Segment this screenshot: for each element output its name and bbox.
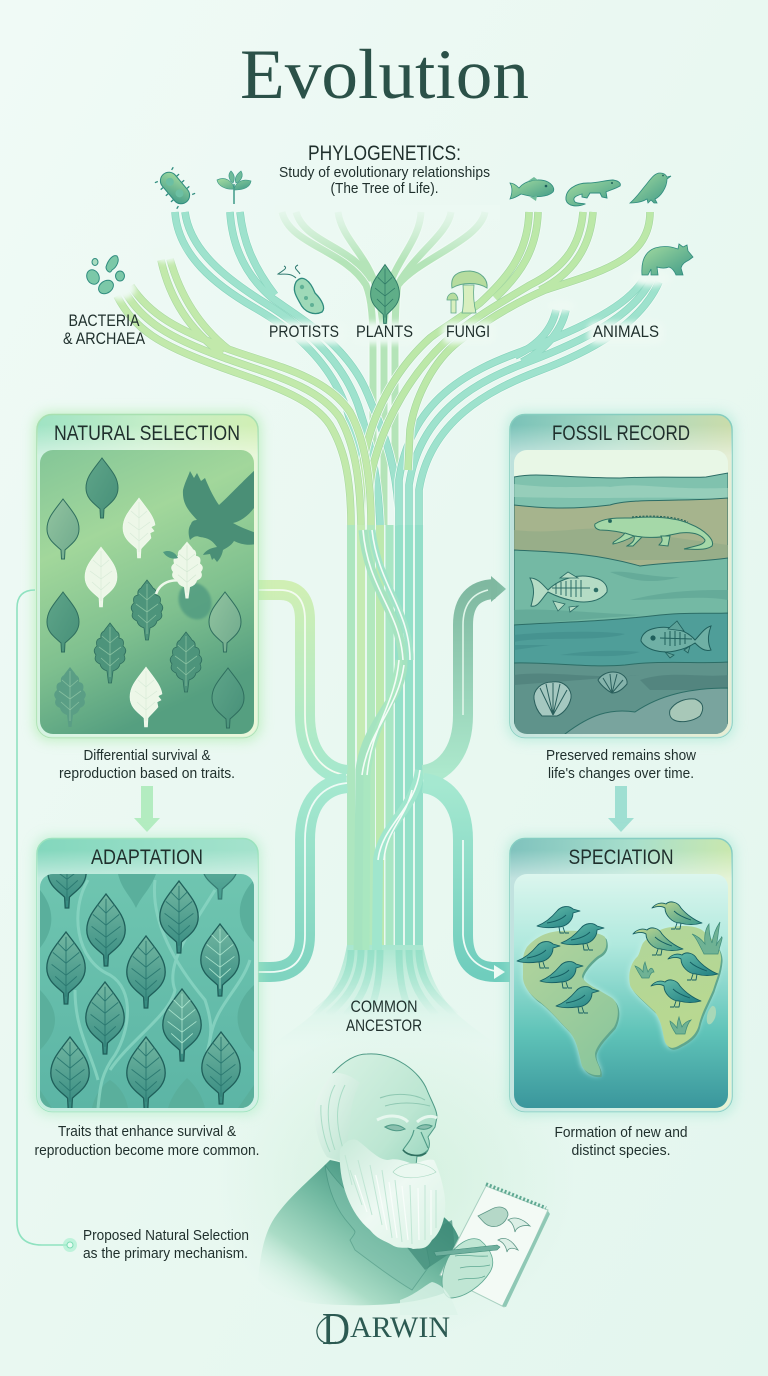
label: common ancestor: COMMON: [350, 997, 418, 1016]
coat: [258, 1160, 464, 1305]
coat lapels: [325, 1165, 430, 1290]
grass tufts: [635, 922, 722, 1034]
branch: protists: [175, 212, 399, 525]
arrow: fossil record to speciation: [608, 786, 634, 832]
caption: fossil record: life's changes over time.: [548, 766, 694, 782]
label: common ancestor: [346, 997, 422, 1035]
phylogenetics heading and description: Study of evolutionary relationships: [279, 165, 490, 181]
icon: bear: [642, 244, 693, 275]
hair: [315, 1073, 360, 1162]
icon: fish: [510, 177, 554, 201]
continent: right: [629, 926, 723, 1050]
branch: animals: [399, 280, 659, 525]
panel: speciation: [507, 836, 735, 1115]
panel: fossil record: [507, 412, 735, 741]
birds: left continent: [517, 907, 604, 1013]
caption: natural selection: reproduction based on traits.: [59, 766, 235, 782]
trunk base: [351, 525, 419, 950]
icon: lizard: [566, 180, 620, 206]
logo: darwin signature: D: [322, 1303, 350, 1354]
panel: adaptation: [34, 833, 261, 1115]
trunk foot: [268, 945, 500, 1048]
notebook: [440, 1184, 550, 1307]
hand with pencil: [400, 1239, 500, 1315]
leaf pattern: [40, 874, 254, 1108]
beard strands: [345, 1155, 436, 1244]
phylogenetics heading and description: PHYLOGENETICS:: [308, 142, 461, 165]
fossil: shells: [534, 672, 703, 722]
icon: cell bacterium: [154, 166, 196, 210]
label: common ancestor: ANCESTOR: [346, 1016, 422, 1035]
caption: adaptation: [34, 1124, 260, 1159]
icon: sprout: [217, 171, 251, 204]
arrow: natural selection to adaptation: [134, 786, 160, 832]
fossil: reptile: [595, 516, 713, 549]
labels: taxa: FUNGI: [446, 322, 490, 341]
tip fades: [104, 205, 671, 344]
phylogenetics heading and description: (The Tree of Life).: [330, 181, 438, 197]
connector: trunk to adaptation: [258, 783, 347, 972]
leaves and predator scene: [47, 458, 256, 728]
caption: speciation: Formation of new and: [554, 1125, 688, 1141]
icon: songbird: [630, 173, 671, 203]
logo: darwin signature: ARWIN: [350, 1311, 450, 1344]
callout text: as the primary mechanism.: [83, 1246, 248, 1262]
labels: taxa: & ARCHAEA: [63, 329, 146, 348]
rock strata scene: [514, 450, 728, 740]
tree of life: [117, 212, 659, 1048]
icon: bird of prey silhouette: [183, 469, 256, 562]
woven trunk strands: [358, 530, 420, 950]
fossil: fish two: [641, 621, 711, 658]
caption: fossil record: Preserved remains show: [546, 748, 696, 764]
icon: plant leaf: [371, 265, 399, 323]
brow, eyes and nose: [377, 1094, 437, 1156]
phylogenetics heading and description: [279, 142, 490, 197]
caption: speciation: distinct species.: [572, 1143, 670, 1159]
hair strands: [321, 1085, 345, 1155]
icon: mushrooms: [447, 271, 487, 313]
connector: natural selection to trunk: [258, 590, 347, 775]
labels: taxa: PLANTS: [356, 322, 413, 341]
caption: adaptation: Traits that enhance survival &: [58, 1124, 236, 1140]
labels: taxa: [63, 311, 659, 348]
portrait: charles darwin: [258, 1054, 550, 1315]
labels: taxa: BACTERIA: [68, 311, 140, 330]
captured pale leaf: [156, 542, 203, 598]
icon: bacteria and archaea: [84, 256, 124, 297]
caption: fossil record: [546, 748, 696, 782]
continent: left: [523, 931, 619, 1077]
title: Evolution: [240, 36, 529, 114]
connector: trunk to fossil record: [423, 576, 506, 775]
logo: darwin signature: [317, 1303, 450, 1354]
branches: plants: [282, 212, 485, 525]
callout text: Proposed Natural Selection: [83, 1228, 249, 1244]
neck shadow: [405, 1220, 455, 1270]
moustache: [393, 1163, 436, 1178]
heading: natural selection: NATURAL SELECTION: [54, 422, 240, 445]
beard: [340, 1139, 445, 1249]
heading: fossil record: FOSSIL RECORD: [552, 422, 690, 445]
heading: adaptation: ADAPTATION: [91, 846, 203, 869]
head: [330, 1054, 437, 1185]
caption: natural selection: Differential survival &: [84, 748, 211, 764]
branch: bacteria and archaea: [117, 259, 371, 525]
connector: trunk to speciation: [423, 783, 510, 979]
labels: taxa: PROTISTS: [269, 322, 339, 341]
callout: line to darwin's mechanism: [17, 590, 77, 1252]
finch sketches: [478, 1207, 508, 1227]
map of diverging birds: [517, 902, 723, 1077]
icon: protist: [278, 265, 324, 314]
root strands: [312, 950, 456, 1015]
birds: right continent: [633, 902, 718, 1007]
caption: speciation: [554, 1125, 688, 1159]
continent glow: [523, 926, 721, 1075]
caption: natural selection: [59, 748, 235, 782]
leaf shadow: [178, 582, 212, 620]
panel: natural selection: [34, 412, 261, 741]
heading: speciation: SPECIATION: [568, 846, 674, 869]
fossil: fish one: [530, 572, 607, 612]
branch: fungi: [361, 212, 650, 525]
caption: adaptation: reproduction become more common.: [34, 1143, 260, 1159]
labels: taxa: ANIMALS: [593, 322, 659, 341]
callout text: [83, 1228, 249, 1262]
